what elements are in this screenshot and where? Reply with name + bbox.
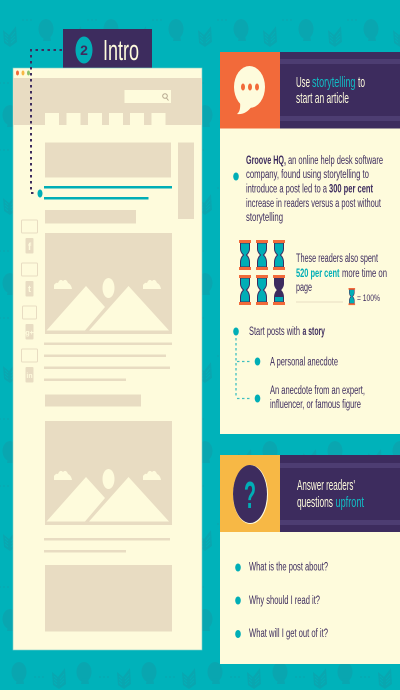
dotted connector from Intro tag to highlighted lines [31, 50, 62, 198]
hourglass chart [239, 240, 285, 305]
social share buttons: f [28, 242, 32, 253]
section tag: Intro [63, 29, 152, 68]
section tag: Intro: Intro [103, 35, 139, 67]
heading band: upfront [336, 495, 364, 511]
text: Groove HQ paragraph: 300 per cent [329, 184, 373, 196]
article title block [45, 142, 171, 178]
text: 520 per cent: 520 per cent [296, 268, 340, 280]
heading band [280, 52, 400, 128]
heading band: storytelling [312, 75, 356, 91]
panel: browser page mockup [13, 68, 202, 650]
bottom content block [45, 565, 172, 632]
heading band [280, 455, 400, 532]
question list [235, 562, 328, 640]
subheading block [45, 210, 136, 224]
text: Groove HQ paragraph: storytelling [246, 212, 283, 224]
icon: question mark on yellow [220, 455, 280, 532]
social share buttons: in [26, 373, 33, 380]
sidebar block [178, 142, 194, 219]
heading band: Answer readers' [297, 478, 355, 494]
text lines 1 [44, 342, 172, 381]
heading band: Use [296, 75, 310, 91]
image placeholder 2 [45, 421, 172, 525]
bullet dot [233, 172, 239, 180]
panel: storytelling [220, 52, 400, 434]
hourglass legend [296, 288, 380, 305]
heading band: start an article [296, 91, 349, 107]
text: Groove HQ paragraph: introduce a post led to a [246, 184, 327, 196]
social share buttons: g+ [25, 330, 34, 337]
text lines 2 [44, 538, 170, 552]
window control dots [16, 70, 30, 76]
hourglass legend: = 100% [357, 293, 380, 303]
list: start posts with a story: A personal anecdote [270, 356, 338, 368]
icon: question mark on yellow: ? [244, 475, 256, 517]
heading band: questions [297, 495, 333, 511]
subheading block 2 [45, 394, 141, 406]
bottom cream strip [0, 690, 400, 700]
highlighted intro lines [44, 186, 172, 200]
section tag: Intro: 2 [80, 42, 88, 58]
text: Groove HQ paragraph [246, 155, 383, 224]
question list: What will I get out of it? [249, 628, 328, 640]
heading band: to [358, 75, 365, 91]
list: start posts with a story [233, 326, 365, 411]
list: start posts with a story: a story [302, 326, 325, 338]
text: 520 per cent [296, 253, 387, 294]
text: 520 per cent: page [296, 282, 312, 294]
question list: Why should I read it? [249, 595, 320, 607]
text: Groove HQ paragraph: Groove HQ, [246, 155, 286, 167]
social share buttons [22, 220, 38, 382]
panel: answer questions [220, 455, 400, 664]
page header with search and tabs [13, 78, 202, 125]
icon: speech bubble on orange [220, 52, 280, 128]
social share buttons: t [28, 284, 31, 294]
image placeholder 1 [45, 233, 172, 334]
question list: What is the post about? [249, 562, 328, 574]
list: start posts with a story: Start posts with [249, 326, 300, 338]
